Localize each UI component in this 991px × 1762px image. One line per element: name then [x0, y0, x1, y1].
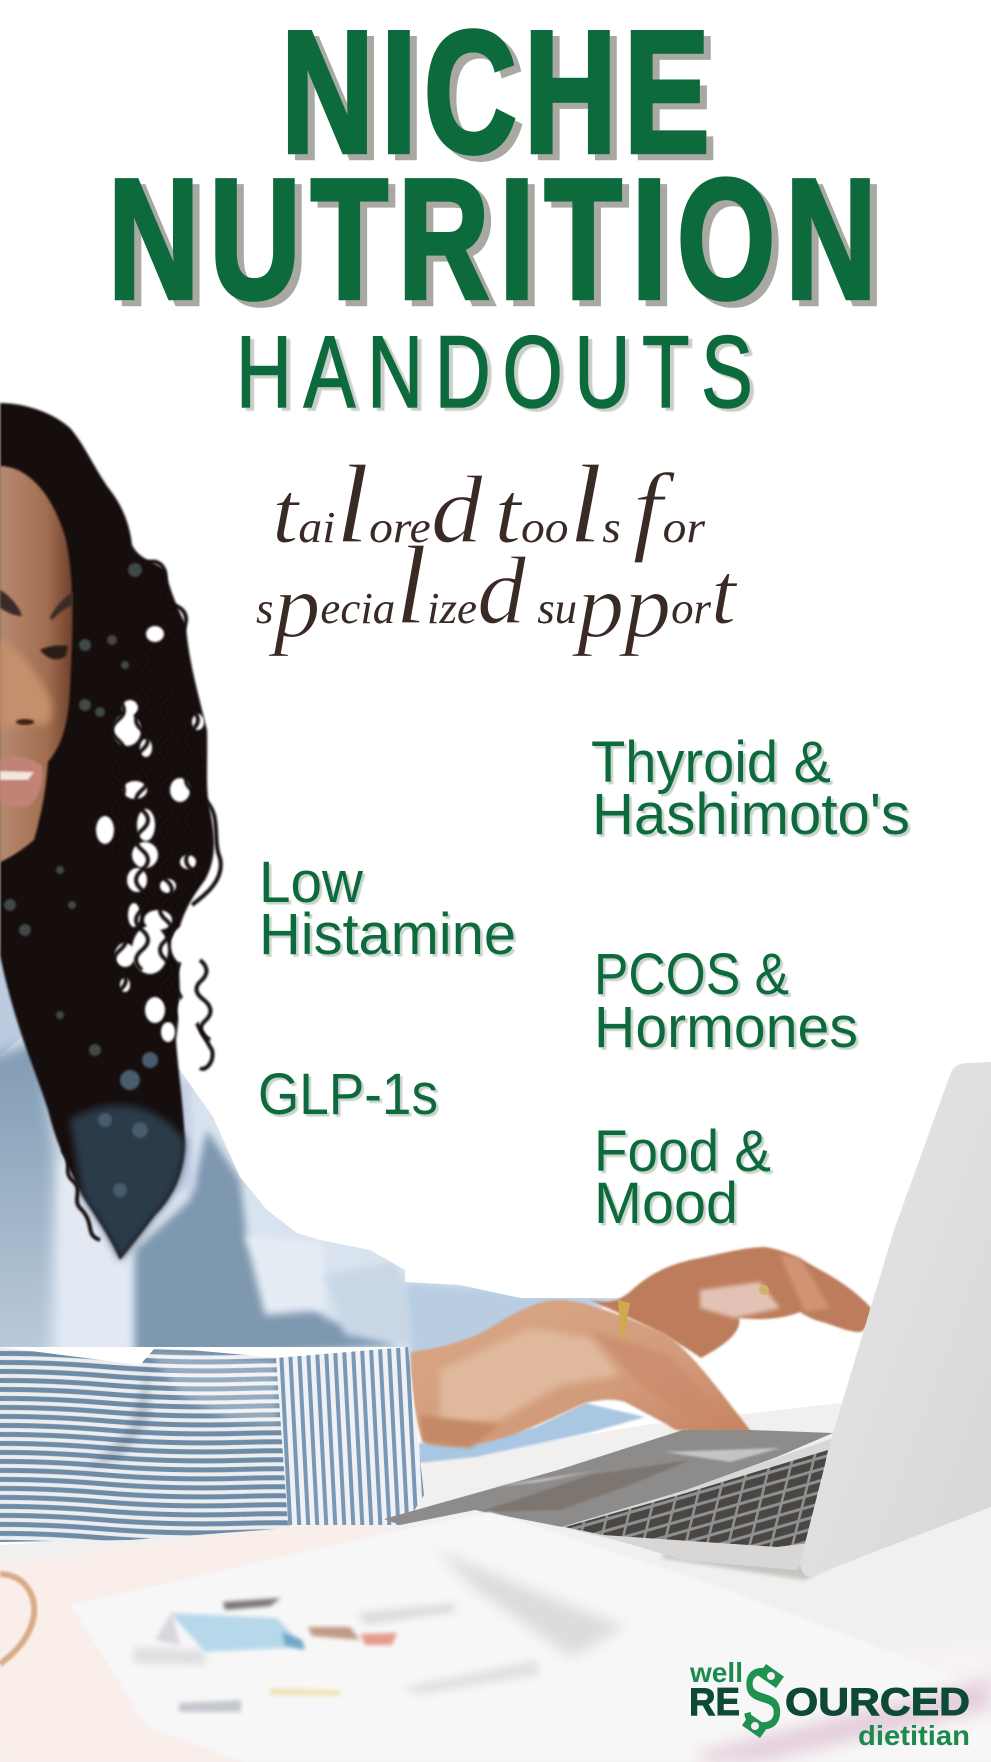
logo: well resourced dietitian: dietitian	[858, 1720, 970, 1751]
bright gaps between curls	[96, 626, 204, 1042]
topic: Thyroid & Hashimoto's: Hashimoto's	[592, 782, 910, 847]
topic: PCOS & Hormones	[594, 942, 858, 1060]
curly hair	[0, 403, 221, 1260]
topic: PCOS & Hormones: PCOS &	[594, 942, 789, 1007]
topic: Low Histamine: Histamine	[259, 902, 516, 967]
eyebrow	[0, 590, 73, 620]
topic: PCOS & Hormones: Hormones	[594, 995, 858, 1060]
topic: GLP-1s: GLP-1s	[258, 1062, 438, 1127]
silver front edge	[562, 1438, 833, 1570]
shadow under the laptop	[660, 1540, 850, 1580]
script tagline	[256, 443, 739, 657]
laptop lid	[800, 1062, 991, 1576]
script tagline: lized su	[395, 524, 576, 648]
script tagline: t	[711, 546, 739, 643]
hand: near hand on keyboard	[411, 1300, 750, 1448]
logo bills	[742, 1664, 784, 1738]
logo: well resourced dietitian: well	[689, 1657, 743, 1688]
subtitle: HANDOUTS: HANDOUTS	[236, 316, 765, 430]
logo S mark: S	[742, 1651, 783, 1746]
shirt cuff	[276, 1347, 424, 1525]
logo: well resourced dietitian: RE	[689, 1681, 740, 1724]
laptop	[384, 1062, 991, 1580]
eye	[40, 645, 68, 659]
gold bracelet	[0, 1574, 34, 1664]
title: NICHE: NICHE	[281, 0, 717, 190]
topic: Low Histamine	[259, 850, 516, 967]
topic: Thyroid & Hashimoto's	[591, 730, 910, 847]
far sleeve under the near hand	[419, 1403, 645, 1463]
face in profile	[0, 466, 73, 862]
lips	[0, 757, 42, 807]
pink streak behind the logo	[700, 1678, 991, 1762]
nose	[0, 640, 52, 730]
script tagline: s	[256, 584, 273, 633]
dark curl strands across the gaps	[112, 650, 211, 1040]
script tagline: tailored tools for	[272, 443, 706, 567]
script tagline: pp	[571, 555, 671, 657]
topic: Thyroid & Hashimoto's: Thyroid &	[591, 730, 831, 795]
logo: well resourced dietitian: OURCED	[785, 1681, 970, 1724]
script tagline: or	[671, 584, 712, 633]
outer curl strands	[62, 562, 221, 1240]
far hand ring	[759, 1285, 769, 1295]
script tagline: ecia	[320, 584, 395, 633]
desk surface	[0, 1403, 991, 1762]
topic: Low Histamine: Low	[259, 850, 364, 915]
title: NUTRITION: NUTRITION	[108, 143, 887, 334]
topic: Food & Mood: Mood	[594, 1171, 738, 1236]
script tagline: p	[267, 555, 320, 657]
shirt body	[0, 940, 640, 1370]
photo: woman typing on a laptop	[0, 403, 991, 1762]
blurred papers on the desk	[71, 1512, 991, 1762]
topic: Food & Mood	[594, 1119, 771, 1236]
topic: Food & Mood: Food &	[594, 1119, 771, 1184]
palm rest	[384, 1430, 833, 1527]
grey glints in the curls	[4, 563, 158, 1197]
keyboard	[565, 1450, 828, 1547]
striped sleeve	[0, 1347, 424, 1542]
logo: well resourced dietitian	[689, 1651, 970, 1751]
blue-tinted lower curls	[70, 1105, 185, 1260]
hand: far hand	[590, 1247, 871, 1358]
near hand ring	[618, 1300, 630, 1338]
